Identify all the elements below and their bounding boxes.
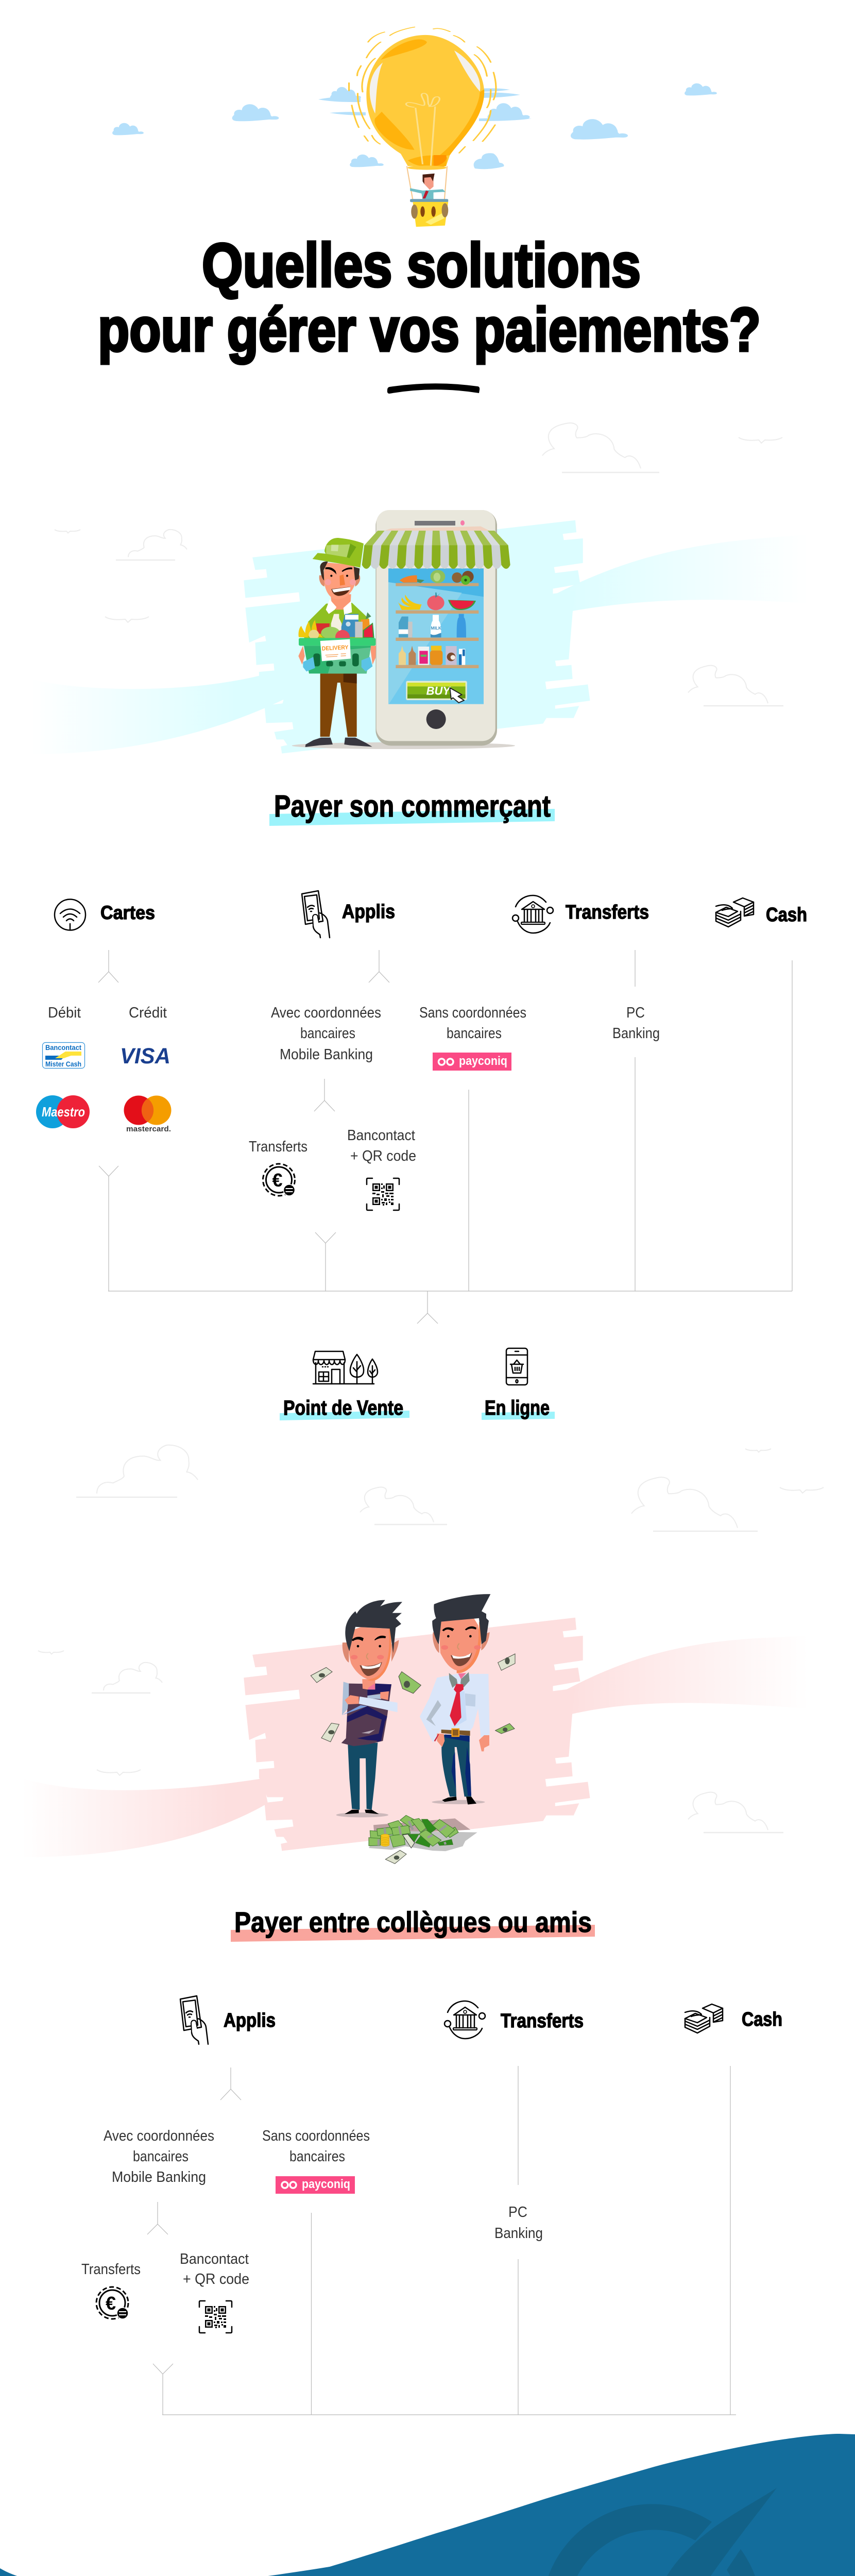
text 2 and logo: sans coordonnées bancaires: bancaires	[289, 2148, 345, 2165]
illustration: grocer and phone shop	[292, 510, 515, 749]
category: Cartes	[55, 900, 155, 930]
text and logo: sans coordonnées bancaires	[419, 1005, 526, 1071]
category 2: Cash	[685, 2004, 782, 2033]
text 2: avec coordonnées bancaires: Avec coordonnées	[104, 2128, 214, 2144]
heading: Payer entre collègues ou amis: Payer entre collègues ou amis	[234, 1906, 592, 1938]
illustration: two colleagues with money	[311, 1594, 515, 1863]
logo: Mastercard	[124, 1095, 171, 1133]
item: Bancontact QR code	[347, 1127, 416, 1210]
text 2: avec coordonnées bancaires: bancaires	[133, 2148, 189, 2165]
footer wave	[0, 2434, 855, 2576]
balloon drawing	[349, 27, 496, 227]
logo: Payconiq	[276, 2176, 355, 2194]
text 2: PC Banking	[494, 2204, 543, 2242]
icon: QR code	[367, 1178, 399, 1210]
logo: Payconiq	[433, 1053, 511, 1071]
column: Crédit	[120, 1005, 171, 1133]
text and logo: sans coordonnées bancaires: bancaires	[447, 1025, 502, 1042]
category: Applis: Applis	[342, 901, 395, 923]
item: Transferts with euro icon	[249, 1139, 307, 1196]
background outline clouds, section 2	[38, 1445, 824, 1833]
category: Cartes: Cartes	[100, 902, 155, 923]
title underline swoosh	[387, 383, 480, 394]
logo: Bancontact Mister Cash: Mister Cash	[45, 1060, 81, 1068]
ground shadow	[292, 742, 515, 749]
item 2: Bancontact QR code	[180, 2251, 249, 2333]
text 2: avec coordonnées bancaires: Mobile Banking	[112, 2169, 206, 2185]
icon: phone in hand	[302, 891, 330, 938]
title: Quelles solutions	[202, 231, 641, 300]
logo: Maestro: Maestro	[42, 1104, 85, 1120]
text: PC Banking: Banking	[612, 1025, 660, 1042]
outcome: Point de Vente: Point de Vente	[283, 1397, 403, 1419]
item 2: Transferts with euro icon: Transferts	[81, 2261, 141, 2278]
text 2 and logo: sans coordonnées bancaires: Sans coordonnées	[262, 2128, 370, 2144]
category: Cash: Cash	[766, 904, 807, 926]
outcome: En ligne: En ligne	[485, 1397, 550, 1419]
category 2: Applis	[180, 1996, 276, 2044]
icon: shop and trees	[313, 1351, 378, 1384]
illustration: hot-air balloon bulb with clouds	[112, 27, 717, 227]
text: PC Banking: PC	[626, 1005, 645, 1021]
buy button: BUY	[426, 684, 451, 697]
icon: contactless card	[55, 900, 86, 930]
text: avec coordonnées bancaires: bancaires	[300, 1025, 355, 1042]
category: Cash	[716, 898, 807, 927]
basket: DELIVERY	[322, 645, 349, 652]
item 2: Transferts with euro icon	[81, 2261, 141, 2319]
item 2: Bancontact QR code: + QR code	[183, 2271, 249, 2287]
text 2 and logo: sans coordonnées bancaires	[262, 2128, 370, 2194]
icon: QR code	[199, 2301, 232, 2333]
icon: phone in hand	[180, 1996, 208, 2044]
item: Bancontact QR code: Bancontact	[347, 1127, 415, 1144]
logo: Visa: VISA	[120, 1044, 170, 1069]
peach strip above awning	[385, 527, 489, 531]
icon: banknotes	[685, 2004, 723, 2033]
category 2: Cash: Cash	[742, 2009, 782, 2030]
category 2: Transferts: Transferts	[501, 2010, 584, 2032]
logo: Maestro	[36, 1095, 90, 1128]
icon: banknotes	[716, 898, 754, 927]
money pile	[369, 1815, 477, 1851]
text: avec coordonnées bancaires	[271, 1005, 381, 1063]
category: Transferts: Transferts	[566, 902, 649, 923]
category 2: Transferts	[444, 2001, 584, 2039]
colleague left	[336, 1600, 402, 1818]
basket	[298, 638, 376, 673]
awning	[362, 531, 510, 569]
groceries	[299, 612, 374, 645]
item: Transferts with euro icon: Transferts	[249, 1139, 307, 1155]
column: Débit	[36, 1005, 90, 1128]
icon: bank transfer	[444, 2001, 485, 2039]
text 2: PC Banking: PC	[508, 2204, 527, 2221]
logo: Mastercard: mastercard.	[126, 1125, 171, 1133]
category: Transferts	[512, 895, 649, 933]
flying banknotes	[311, 1654, 515, 1863]
logo: Payconiq: payconiq	[302, 2177, 350, 2191]
category 2: Applis: Applis	[224, 2010, 276, 2031]
tree section 2: connector lines	[147, 2066, 736, 2415]
outcome: En ligne	[482, 1348, 555, 1420]
text: PC Banking	[612, 1005, 660, 1042]
background outline clouds, section 1	[55, 423, 783, 706]
text 2: PC Banking: Banking	[494, 2225, 543, 2242]
footer watermark: magnifier and check	[502, 2488, 777, 2576]
logo: Payconiq: payconiq	[459, 1054, 507, 1068]
icon: euro transfer	[263, 1164, 295, 1196]
icon: euro transfer	[96, 2287, 128, 2319]
logo: Bancontact Mister Cash: Bancontact	[45, 1043, 81, 1052]
shelf products: MILK	[431, 625, 441, 631]
icon: blue clouds	[112, 83, 717, 169]
icon: phone with basket	[506, 1348, 527, 1385]
heading: Payer son commerçant: Payer son commerçant	[274, 789, 551, 823]
text: avec coordonnées bancaires: Avec coordonnées	[271, 1005, 381, 1021]
text and logo: sans coordonnées bancaires: Sans coordonnées	[419, 1005, 526, 1021]
item 2: Bancontact QR code: Bancontact	[180, 2251, 249, 2267]
cyan paint brush background and ribbons	[31, 520, 807, 754]
shelf products	[398, 570, 476, 665]
pink paint brush background and ribbons	[22, 1618, 807, 1857]
tree section 1: connector lines	[98, 950, 792, 1324]
outcome: Point de Vente	[280, 1351, 409, 1420]
item: Bancontact QR code: + QR code	[350, 1148, 416, 1164]
category: Applis	[302, 891, 395, 938]
logo: Bancontact Mister Cash	[42, 1043, 84, 1069]
text: avec coordonnées bancaires: Mobile Banking	[280, 1046, 373, 1063]
phone	[375, 510, 497, 745]
icon: bank transfer	[512, 895, 553, 933]
text 2: avec coordonnées bancaires	[104, 2128, 214, 2185]
column: Crédit: Crédit	[129, 1005, 167, 1021]
buy button	[406, 681, 467, 703]
column: Débit: Débit	[48, 1005, 81, 1021]
grocer man	[298, 538, 376, 747]
colleague right	[420, 1594, 490, 1804]
title	[98, 231, 761, 364]
